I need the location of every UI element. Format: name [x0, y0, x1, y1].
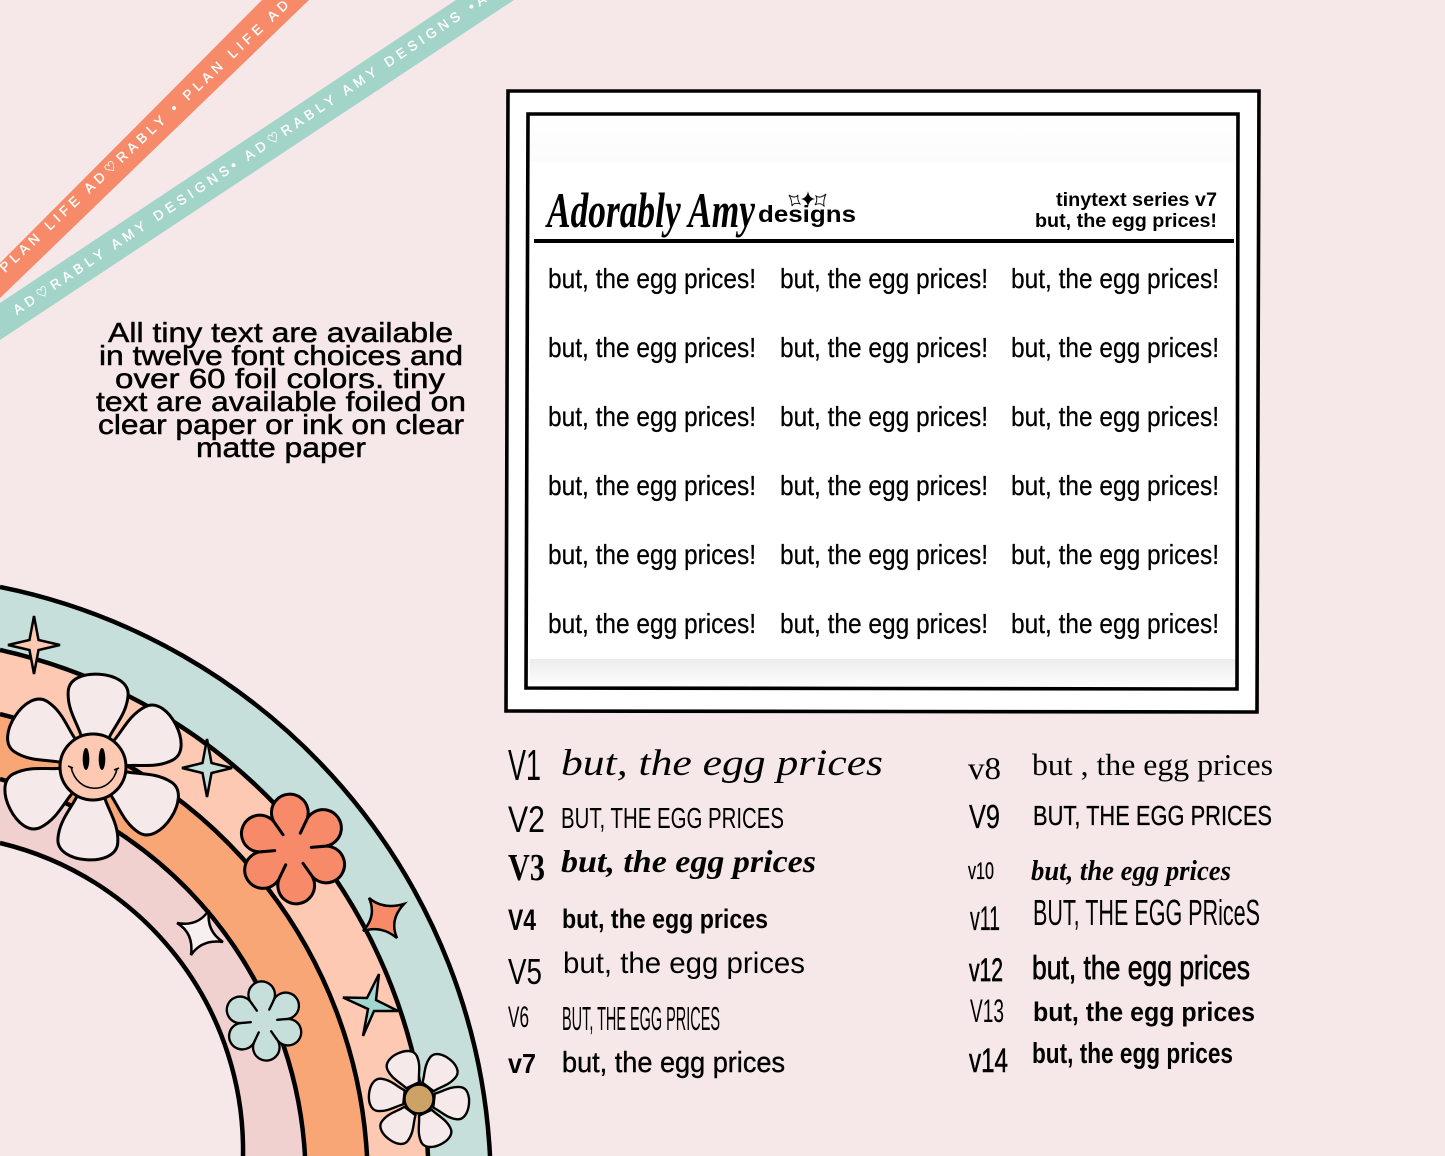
rainbow band fills [0, 587, 490, 1156]
ribbon: adorably amy designs: AD♡RABLY AMY DESIGNS• AD♡RABLY AMY DESIGNS •A [10, 0, 489, 317]
sheet title: tinytext series v7 [1056, 190, 1217, 211]
rainbow band outlines [0, 587, 490, 1156]
font list: right column: V9 [969, 798, 1000, 835]
text block: availability note: All tiny text are available [108, 317, 453, 348]
icon: white curved star [177, 910, 223, 955]
font list: right column: but , the egg prices [1032, 747, 1273, 782]
font list: left column: BUT, THE EGG PRICES [561, 803, 784, 835]
bottom shading [530, 659, 1236, 687]
font list: left column: but, the egg prices [561, 743, 883, 784]
icon: peach sparkle [8, 616, 60, 674]
sticker text grid: but, the egg prices! [1011, 401, 1219, 432]
font list: left column: BUT, THE EGG PRICES [562, 1000, 720, 1037]
icon: pale teal sparkle [182, 739, 232, 797]
sticker text grid: but, the egg prices! [548, 608, 756, 639]
font list: left column: V4 [508, 904, 536, 937]
font list: left column: but, the egg prices [562, 904, 768, 934]
sticker text grid: but, the egg prices! [780, 332, 988, 363]
text block: availability note: in twelve font choices and [99, 340, 463, 371]
font list: right column: v11 [970, 900, 1000, 938]
font list: left column: v7 [508, 1048, 536, 1079]
sticker text grid: but, the egg prices! [548, 263, 756, 294]
sticker text grid: but, the egg prices! [780, 470, 988, 501]
product sheet [506, 91, 1259, 712]
font list: right column: but, the egg prices [1032, 949, 1250, 986]
font list: left column: V5 [508, 951, 542, 992]
font list: right column: v14 [969, 1042, 1008, 1080]
font list: left column: V6 [508, 1001, 529, 1034]
sticker text grid: but, the egg prices! [1011, 608, 1219, 639]
font list: right column: v12 [969, 952, 1003, 988]
font list: left column: V3 [508, 847, 545, 889]
sticker text grid: but, the egg prices! [1011, 263, 1219, 294]
logo: adorably amy designs: designs [758, 201, 856, 227]
icon: white daisy [367, 1047, 471, 1151]
icon: coral curved star [363, 898, 404, 938]
sticker text grid: but, the egg prices! [780, 608, 988, 639]
font list: right column: but, the egg prices [1031, 856, 1231, 887]
font list: left column: V2 [508, 799, 545, 840]
inner sheet frame [526, 114, 1238, 689]
font list: right column: V13 [970, 993, 1004, 1029]
icon: coral flower [238, 790, 348, 908]
sheet title: but, the egg prices! [1035, 211, 1217, 232]
text block: availability note: over 60 foil colors. tiny [115, 363, 445, 394]
sticker text grid: but, the egg prices! [780, 539, 988, 570]
text block: availability note: text are available foiled on [96, 386, 466, 417]
font list: left column: but, the egg prices [563, 947, 805, 980]
sticker text grid: but, the egg prices! [780, 263, 988, 294]
icon: smiley flower [0, 672, 189, 862]
sticker text grid: but, the egg prices! [1011, 332, 1219, 363]
font list: right column [968, 747, 1273, 1080]
sticker text grid: but, the egg prices! [548, 401, 756, 432]
sticker text grid [548, 263, 1219, 639]
sticker text grid: but, the egg prices! [548, 332, 756, 363]
sticker text grid: but, the egg prices! [1011, 470, 1219, 501]
font list: right column: BUT, THE EGG PRICES [1033, 800, 1272, 831]
font list: right column: but, the egg prices [1033, 997, 1255, 1027]
sticker text grid: but, the egg prices! [548, 539, 756, 570]
sticker text grid: but, the egg prices! [780, 401, 988, 432]
font list: left column [508, 741, 883, 1079]
font list: right column: but, the egg prices [1032, 1038, 1233, 1070]
text block: availability note [96, 317, 466, 463]
text block: availability note: clear paper or ink on clear [98, 409, 464, 440]
font list: left column: but, the egg prices [561, 843, 816, 879]
font list: left column: but, the egg prices [562, 1047, 785, 1079]
ribbon: plan life adorably: PLAN LIFE AD♡RABLY • PLAN LIFE AD [0, 0, 292, 275]
header rule [534, 239, 1234, 243]
sticker text grid: but, the egg prices! [1011, 539, 1219, 570]
icon: teal pointed star [343, 974, 398, 1036]
icon: pale teal flower [225, 978, 303, 1064]
text block: availability note: matte paper [196, 432, 366, 463]
font list: right column: v10 [968, 858, 994, 885]
top shading [530, 116, 1236, 162]
sticker text grid: but, the egg prices! [548, 470, 756, 501]
logo: adorably amy designs: Adorably Amy [545, 182, 756, 238]
font list: right column: BUT, THE EGG PRiceS [1033, 892, 1260, 933]
font list: right column: v8 [968, 750, 1001, 786]
font list: left column: V1 [508, 741, 541, 790]
rainbow illustration [0, 587, 490, 1156]
outer sheet frame [506, 91, 1259, 712]
sheet title [1035, 190, 1217, 232]
